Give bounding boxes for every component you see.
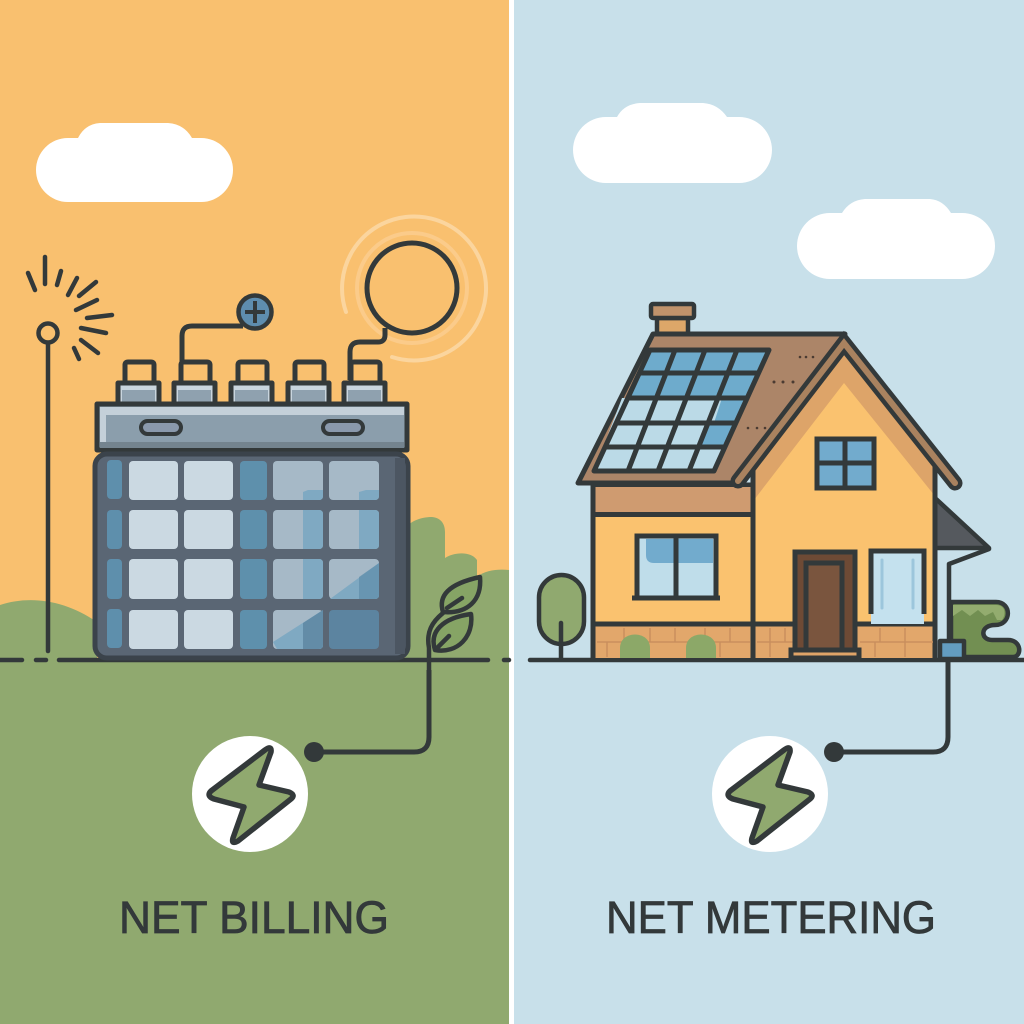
cell columns 2 and 3 [129, 461, 233, 649]
plant with leaves [428, 577, 480, 680]
icon: lightning bolt badge [712, 736, 828, 852]
ground [0, 660, 509, 1024]
cell column 1 [107, 460, 122, 648]
shrubs [620, 634, 716, 658]
roof detail dots [747, 356, 814, 429]
ground line [0, 658, 509, 662]
battery body with solar cells [95, 454, 408, 658]
heading: net billing: NET BILLING [119, 892, 389, 943]
tree [539, 575, 584, 658]
ground line [530, 658, 1024, 662]
gable window [817, 439, 874, 488]
street lamp [28, 257, 112, 651]
battery terminals [118, 362, 385, 404]
roof [578, 334, 845, 483]
cell columns 5 and 6 [273, 461, 379, 649]
panel: net metering [514, 0, 1024, 1024]
connector line [824, 660, 948, 762]
front door [791, 552, 859, 658]
cell column 4 [240, 461, 267, 649]
icon: lightning bolt badge [192, 736, 308, 852]
battery lid [97, 404, 407, 450]
heading: net metering: NET METERING [606, 892, 936, 943]
panel: net billing [0, 0, 509, 1024]
cell reflections [273, 490, 379, 649]
left wing wall [593, 485, 753, 659]
left wing brick base [593, 624, 753, 658]
side awning and gutter [935, 498, 989, 659]
french window [871, 551, 924, 624]
solar panel array [594, 350, 769, 471]
positive terminal [238, 296, 272, 328]
connector line [304, 670, 429, 762]
wires [182, 326, 385, 380]
green hills [0, 517, 509, 662]
cloud left panel [36, 123, 233, 202]
chimney [651, 304, 694, 334]
sun [342, 216, 486, 360]
main house wall [753, 345, 935, 658]
hedge [951, 602, 1019, 657]
left wing window [632, 536, 720, 598]
cloud upper [573, 103, 772, 183]
gable fascia [738, 343, 955, 483]
cloud lower [797, 199, 995, 279]
